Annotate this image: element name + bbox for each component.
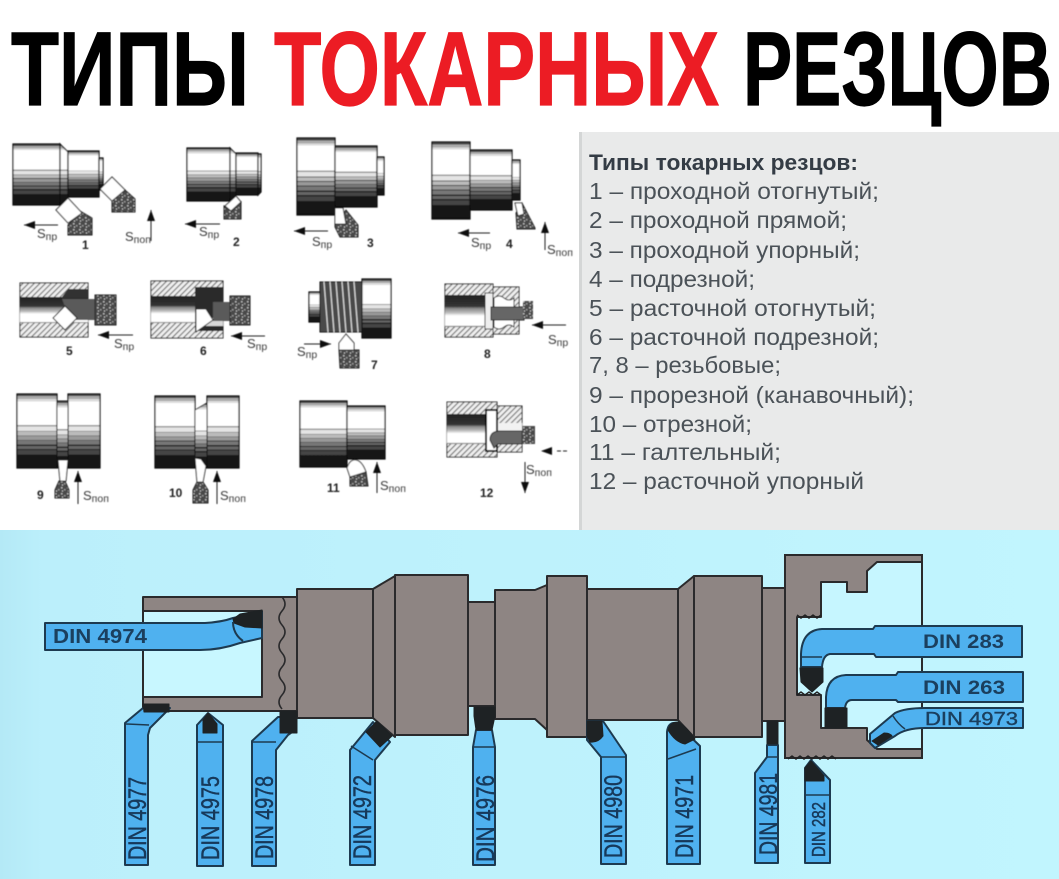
figure 4: поп [556, 247, 573, 259]
figure 4: 4 [506, 237, 513, 251]
figure 5: 5 [66, 344, 73, 358]
figure 7: пр [306, 349, 317, 361]
figure 2: S [199, 224, 208, 239]
figure 12: 12 [480, 486, 494, 500]
text block: numbered list [589, 178, 914, 494]
figure 9: S [83, 488, 92, 503]
figure 7 [297, 279, 391, 372]
figure 3: пр [321, 239, 332, 251]
tool: DIN 4977 [124, 704, 170, 865]
figure 3: S [312, 234, 321, 249]
figure 3 [294, 138, 384, 251]
tool: DIN 4976: DIN 4976 [472, 775, 500, 862]
figure 1: S [125, 229, 134, 244]
left bored section [143, 597, 297, 711]
figure 5 [20, 283, 134, 358]
figure 1: S [37, 226, 46, 241]
figure 1: пр [46, 231, 57, 243]
figure 2: пр [208, 229, 219, 241]
figure 10: 10 [169, 486, 183, 500]
tool: DIN 4977: DIN 4977 [124, 777, 152, 860]
panel: twelve cutter drawings [13, 138, 573, 505]
text block: numbered list: 11 – галтельный; [589, 439, 781, 465]
tool: DIN 282 [805, 760, 830, 863]
figure 1 [13, 144, 151, 252]
tool: DIN 283: DIN 283 [923, 632, 1004, 653]
figure 1: 1 [82, 238, 89, 252]
figure 8: S [548, 332, 557, 347]
figure 4: S [547, 242, 556, 257]
text block: numbered list: 1 – проходной отогнутый; [589, 178, 879, 204]
figure 11: S [380, 478, 389, 493]
figure 11 [300, 401, 406, 495]
text block: numbered list: 10 – отрезной; [589, 411, 752, 437]
tool: DIN 4975: DIN 4975 [197, 776, 225, 860]
tool: DIN 4973: DIN 4973 [925, 709, 1018, 729]
tool: DIN 4974: DIN 4974 [53, 626, 148, 648]
tool: DIN 263: DIN 263 [923, 678, 1005, 699]
tool: DIN 4972: DIN 4972 [349, 775, 377, 859]
figure 12 [447, 402, 567, 500]
diagram: workpiece and chuck [143, 555, 922, 759]
figure 4: S [471, 235, 480, 250]
tool: DIN 283 [800, 626, 1022, 692]
figure 9: поп [92, 493, 109, 505]
figure 9 [17, 394, 109, 505]
figure 5: пр [123, 341, 134, 353]
figure 7: S [297, 344, 306, 359]
figure 12: S [526, 462, 535, 477]
tool: DIN 4976 [472, 707, 500, 865]
text block: numbered list: 3 – проходной упорный; [589, 237, 860, 263]
text block: numbered list: 6 – расточной подрезной; [589, 324, 879, 350]
figure 1: поп [134, 234, 151, 246]
tool: DIN 4980 [587, 721, 628, 864]
title: ТОКАРНЫХ [274, 11, 719, 128]
text block: numbered list: 7, 8 – резьбовые; [589, 352, 781, 378]
figure 2: 2 [233, 235, 240, 249]
figure 2 [185, 148, 261, 249]
figure 10: поп [229, 493, 246, 505]
text block: numbered list: 12 – расточной упорный [589, 468, 864, 494]
figure 5: S [114, 336, 123, 351]
figure 6: S [247, 336, 256, 351]
title [11, 11, 1052, 128]
figure 7: 7 [371, 358, 378, 372]
figure 8: 8 [484, 347, 491, 361]
figure 6: пр [256, 341, 267, 353]
thread break line [279, 597, 285, 709]
figure 9: 9 [37, 488, 44, 502]
tool: DIN 4981: DIN 4981 [755, 773, 783, 855]
figure 3: 3 [367, 236, 374, 250]
panel: list of cutter types [579, 132, 1059, 530]
figure 8: пр [557, 337, 568, 349]
tool: DIN 4971 [667, 722, 700, 864]
text block: numbered list: 9 – прорезной (канавочный); [589, 382, 914, 408]
tool: DIN 4975 [197, 713, 225, 866]
tool: DIN 4974 [45, 610, 262, 650]
tool: DIN 4978: DIN 4978 [251, 776, 279, 859]
shaft segments [297, 575, 785, 737]
figure 11: 11 [327, 481, 340, 495]
text block: numbered list: 2 – проходной прямой; [589, 207, 847, 233]
figure 12: поп [535, 467, 552, 479]
heading: cutter types: Типы токарных резцов: [589, 150, 858, 175]
figure 8 [445, 284, 568, 361]
figure 6 [151, 281, 267, 358]
text block: numbered list: 5 – расточной отогнутый; [589, 295, 876, 321]
tool: DIN 4972 [349, 721, 392, 865]
tool: DIN 4973 [870, 708, 1023, 748]
tool: DIN 263 [825, 672, 1023, 728]
tool: DIN 282: DIN 282 [809, 802, 829, 857]
tool: DIN 4971: DIN 4971 [671, 775, 699, 858]
panel: blue background [0, 530, 1059, 879]
chuck [785, 555, 922, 759]
figure 4: пр [480, 240, 491, 252]
figure 4 [432, 142, 573, 259]
tool: DIN 4978 [251, 711, 297, 866]
tool: DIN 4980: DIN 4980 [600, 775, 628, 858]
figure 10 [155, 396, 246, 505]
figure 11: поп [389, 483, 406, 495]
figure 10: S [220, 488, 229, 503]
title: ТИПЫ [11, 11, 249, 128]
text block: numbered list: 4 – подрезной; [589, 266, 755, 292]
figure 6: 6 [200, 344, 207, 358]
